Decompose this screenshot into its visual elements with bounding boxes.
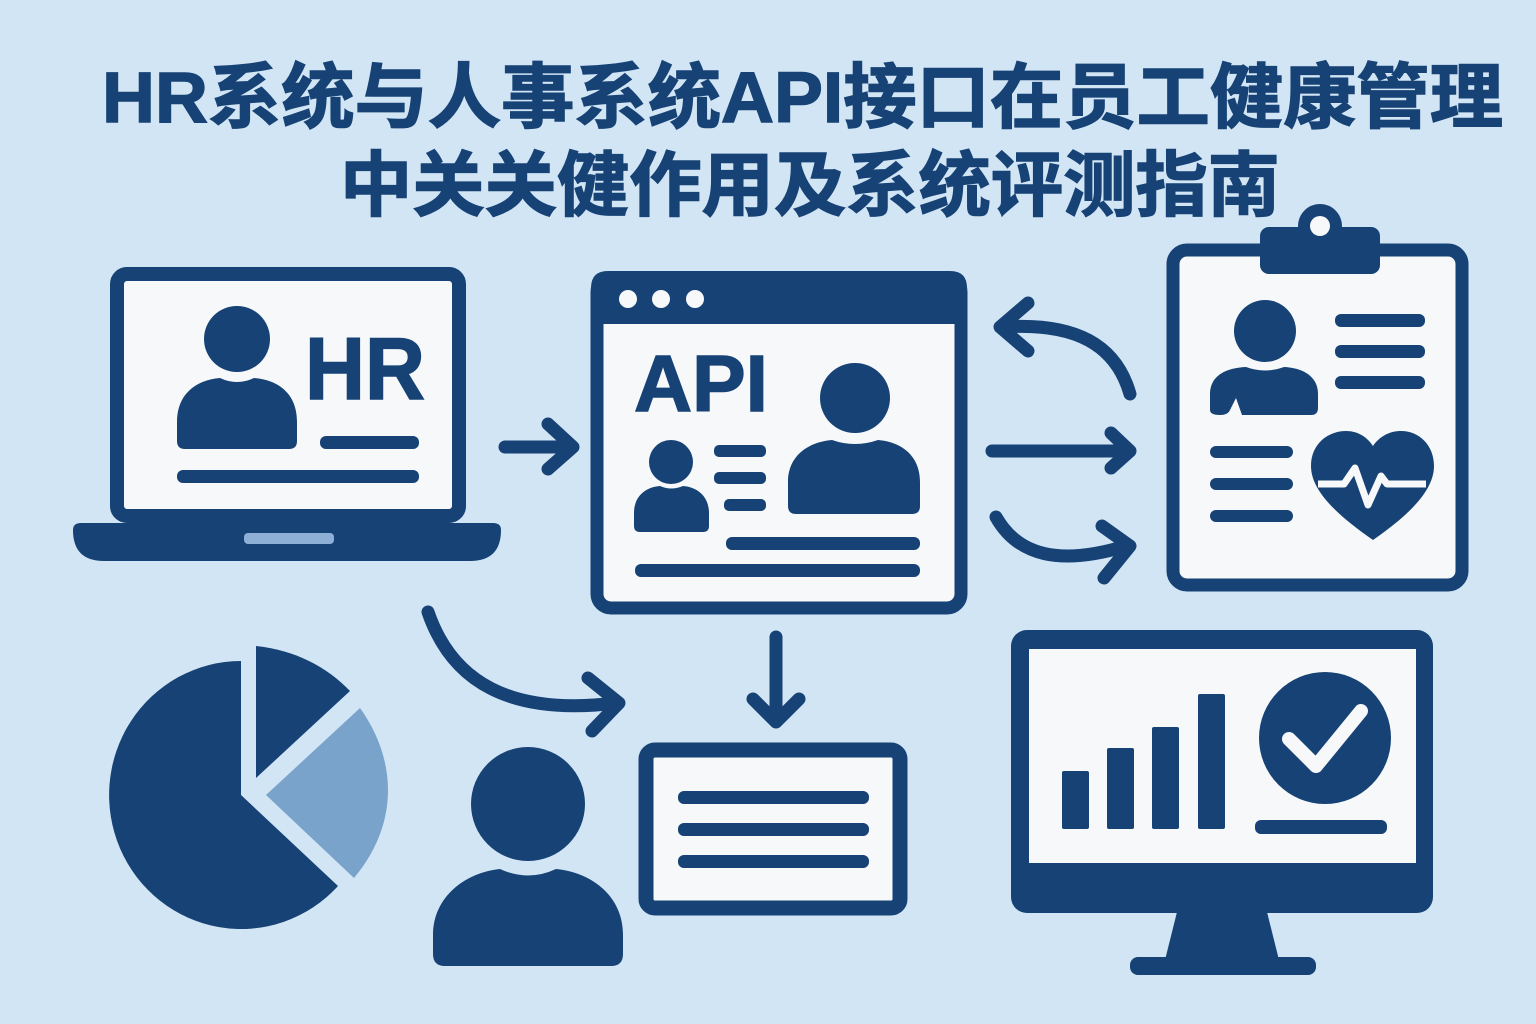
arrow: API to clipboard bbox=[992, 433, 1130, 468]
icon: check badge bbox=[1259, 672, 1391, 804]
icon: report panel bbox=[646, 750, 900, 908]
icon: HR laptop: HR bbox=[305, 319, 425, 418]
title bbox=[102, 59, 1503, 226]
arrow: API curved to clipboard bbox=[996, 517, 1130, 578]
pie chart bbox=[109, 646, 388, 929]
arrow: clipboard back to API bbox=[1000, 303, 1130, 394]
icon: health clipboard bbox=[1173, 204, 1462, 585]
title: HR系统与人事系统API接口在员工健康管理 bbox=[102, 59, 1503, 138]
icon: heart with pulse bbox=[1311, 431, 1434, 540]
icon: HR laptop bbox=[73, 274, 501, 561]
bar chart bbox=[1062, 694, 1225, 829]
arrow: API down to report bbox=[753, 637, 799, 722]
icon: person bbox=[433, 747, 623, 966]
title: 中关关健作用及系统评测指南 bbox=[340, 147, 1280, 226]
icon: evaluation monitor bbox=[1011, 630, 1433, 975]
arrow: laptop to API bbox=[505, 424, 573, 469]
icon: API window bbox=[591, 271, 967, 608]
icon: API window: API bbox=[634, 339, 768, 428]
arrow: laptop curved to report bbox=[428, 612, 619, 731]
